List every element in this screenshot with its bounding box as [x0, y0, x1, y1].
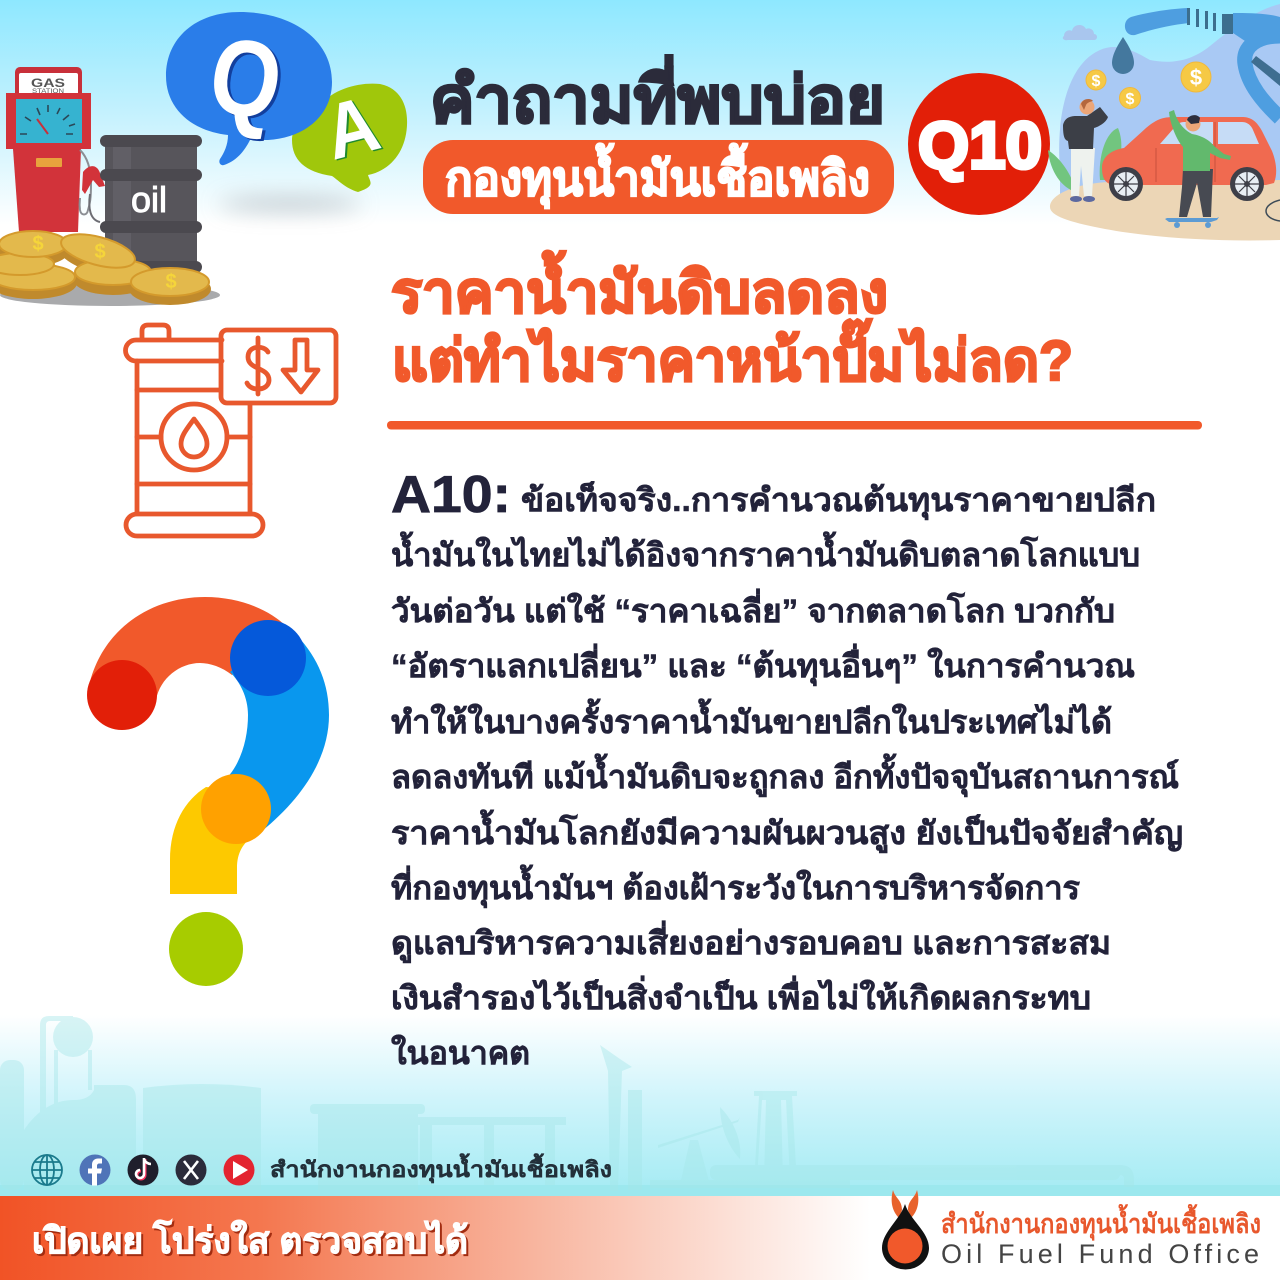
logo: Oil Fuel Fund Office: Oil Fuel Fund Office: [941, 1239, 1259, 1269]
A10 label: A10:: [391, 466, 511, 524]
illustration: car, people and fuel nozzle: [1048, 4, 1280, 240]
hose: [1266, 200, 1280, 221]
Q10 badge: Q10: [918, 108, 1042, 182]
icon: coin pile: [0, 228, 220, 306]
heading: main question: แต่ทำไมราคาหน้าปั๊มไม่ลด?: [392, 319, 1073, 393]
cloud: [1063, 25, 1097, 40]
icon: coin pile: $: [32, 233, 44, 255]
skateboarder: [1165, 110, 1231, 228]
icon: gas pump: [6, 67, 105, 232]
ground: [1050, 180, 1280, 240]
icon: x: [176, 1154, 206, 1186]
coins: [1086, 62, 1211, 108]
subtitle pill: [423, 140, 894, 214]
car: [1102, 117, 1276, 201]
icon: gas pump: STATION: [32, 89, 64, 95]
icon: answer bubble: A: [318, 80, 390, 177]
icon: coin pile: $: [94, 241, 106, 263]
answer paragraph: ที่กองทุนน้ำมันฯ ต้องเฝ้าระวังในการบริหารจัดการ: [391, 864, 1080, 909]
icon: oil barrel: oil: [131, 179, 167, 220]
answer text: [391, 466, 1183, 1071]
icon: question bubble: [166, 12, 332, 165]
icon: youtube play: [224, 1154, 254, 1186]
illustration: car, people and fuel nozzle: $: [1190, 65, 1202, 90]
icon: facebook: [80, 1154, 110, 1186]
answer paragraph: ในอนาคต: [391, 1034, 530, 1071]
blue blob: [1059, 4, 1280, 194]
illustration: car, people and fuel nozzle: $: [1126, 91, 1135, 108]
footer slogan: เปิดเผย โปร่งใส ตรวจสอบได้: [34, 1221, 470, 1263]
illustration: gas pump, oil barrel and coins: [0, 67, 220, 306]
icon: gas pump: GAS: [31, 76, 65, 90]
answer paragraph: [391, 480, 1183, 1071]
bubble shadow: [218, 197, 362, 211]
answer paragraph: น้ำมันในไทยไม่ได้อิงจากราคาน้ำมันดิบตลาดโลกแบบ: [391, 531, 1140, 573]
logo: Oil Fuel Fund Office: [882, 1190, 1261, 1269]
answer paragraph: ราคาน้ำมันโลกยังมีความผันผวนสูง ยังเป็นปัจจัยสำคัญ: [391, 809, 1183, 854]
answer paragraph: ทำให้ในบางครั้งราคาน้ำมันขายปลีกในประเทศไม่ได้: [391, 698, 1112, 740]
refinery silhouette: [0, 1016, 1134, 1191]
subtitle pill: กองทุนน้ำมันเชื้อเพลิง: [445, 143, 870, 209]
Q10 badge: [908, 73, 1050, 215]
heading: main question: ราคาน้ำมันดิบลดลง: [391, 251, 888, 325]
icon: answer bubble: [292, 79, 407, 192]
logo flame and drop: [882, 1190, 929, 1269]
answer paragraph: ข้อเท็จจริง..การคำนวณต้นทุนราคาขายปลีก: [521, 480, 1156, 521]
answer paragraph: ลดลงทันที แม้น้ำมันดิบจะถูกลง อีกทั้งปัจจุบันสถานการณ์: [391, 753, 1179, 798]
icon: website globe: [32, 1155, 62, 1185]
person thinking: [1063, 99, 1108, 202]
social media row: [32, 1153, 612, 1186]
answer paragraph: วันต่อวัน แต่ใช้ “ราคาเฉลี่ย” จากตลาดโลก บวกกับ: [391, 588, 1115, 629]
footer slogan: เปิดเผย โปร่งใส ตรวจสอบได้: [32, 1219, 468, 1261]
divider: [387, 421, 1202, 430]
icon: question bubble: Q: [204, 14, 294, 146]
answer paragraph: “อัตราแลกเปลี่ยน” และ “ต้นทุนอื่นๆ” ในการคำนวณ: [391, 643, 1135, 687]
icon: answer bubble: A: [316, 79, 388, 176]
fuel nozzle: [1125, 8, 1280, 118]
title: คำถามที่พบบ่อย: [430, 55, 885, 136]
illustration: car, people and fuel nozzle: $: [1092, 73, 1101, 90]
icon: coin pile: $: [165, 271, 177, 293]
social handle text: สำนักงานกองทุนน้ำมันเชื้อเพลิง: [270, 1153, 612, 1184]
icon: barrel with dollar and down arrow: [126, 325, 336, 536]
icon: question bubble: Q: [201, 12, 291, 144]
icon: tiktok: [128, 1154, 158, 1186]
icon: oil barrel: [100, 135, 202, 273]
plants: [1048, 128, 1121, 192]
answer paragraph: เงินสำรองไว้เป็นสิ่งจำเป็น เพื่อไม่ให้เกิดผลกระทบ: [391, 975, 1091, 1016]
Q and A speech bubbles: [166, 12, 407, 211]
icon: colourful question mark: [87, 597, 329, 986]
footer band: [0, 1196, 1280, 1280]
oil drop: [1112, 37, 1134, 74]
answer paragraph: ดูแลบริหารความเสี่ยงอย่างรอบคอบ และการสะสม: [391, 920, 1111, 964]
heading: main question: [391, 251, 1073, 393]
